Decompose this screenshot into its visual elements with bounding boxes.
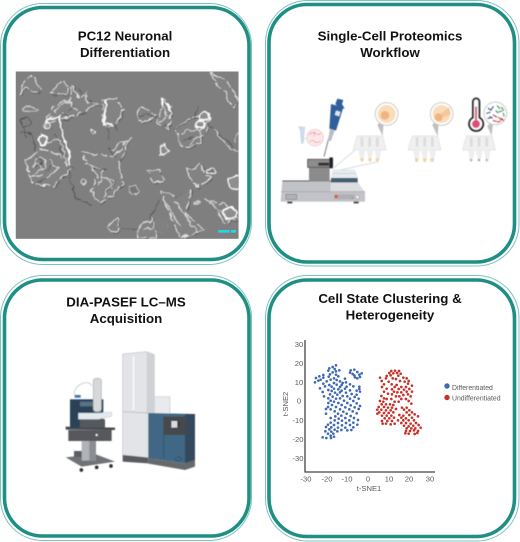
icon: mass spectrometer — [123, 352, 195, 470]
y axis tick labels: -20 — [293, 435, 303, 444]
icon: sample tube and cell — [299, 127, 323, 146]
x axis tick labels: 30 — [426, 474, 434, 484]
workflow illustration — [281, 98, 507, 203]
heading: Single-Cell Proteomics Workflow: Workflow — [360, 45, 420, 60]
y axis tick labels: 30 — [295, 340, 303, 349]
red points: undifferentiated — [377, 371, 421, 434]
icon: connector lines — [333, 149, 378, 171]
heading: Single-Cell Proteomics Workflow: Single-Cell Proteomics — [318, 28, 462, 44]
heading: Cell State Clustering & Heterogeneity: Cell State Clustering & — [318, 291, 462, 306]
axes — [305, 340, 435, 472]
heading: PC12 Neuronal Differentiation: PC12 Neuronal — [78, 28, 172, 44]
group: tube plate 3 with lysed-cell callout — [463, 102, 507, 162]
panel: single-cell proteomics workflow — [266, 0, 519, 266]
dark halos — [20, 75, 240, 240]
x axis tick labels: 0 — [366, 474, 370, 484]
legend: Differentiated — [452, 385, 493, 392]
round cells — [39, 135, 47, 145]
y axis tick labels: 0 — [297, 396, 301, 406]
x axis tick labels: 10 — [385, 474, 393, 484]
x axis tick labels: -20 — [322, 474, 332, 484]
axis label: t-SNE2: t-SNE2 — [281, 392, 290, 416]
axis label: t-SNE1: t-SNE1 — [357, 484, 381, 493]
panel: cell state clustering and heterogeneity — [266, 276, 519, 541]
instrument illustration — [66, 352, 195, 472]
legend — [444, 383, 501, 402]
y axis tick labels: 10 — [295, 378, 303, 387]
x axis tick labels: -30 — [301, 474, 311, 484]
t-SNE scatter plot — [281, 340, 501, 493]
cell bodies — [19, 75, 42, 94]
heading: PC12 Neuronal Differentiation: Differentiation — [80, 45, 170, 60]
micrograph: PC12 cells — [16, 71, 243, 240]
scale bar — [218, 230, 236, 233]
group: tube plate 1 with cell callout — [353, 103, 398, 161]
y axis tick labels: -30 — [293, 454, 303, 463]
x axis tick labels: -10 — [342, 474, 352, 484]
x axis tick labels: 20 — [405, 474, 413, 484]
icon: thermometer — [469, 98, 483, 131]
interior texture — [30, 102, 230, 233]
panel: PC12 neuronal differentiation — [0, 4, 252, 264]
heading: Cell State Clustering & Heterogeneity: Heterogeneity — [346, 308, 435, 322]
icon: dispensing instrument — [281, 157, 365, 203]
panel: DIA-PASEF LC-MS acquisition — [0, 276, 252, 540]
icon: LC system on cart — [66, 378, 115, 472]
heading: DIA-PASEF LC–MS Acquisition: Acquisition — [90, 311, 162, 326]
blue points: differentiated — [315, 365, 362, 438]
y axis tick labels: 20 — [295, 359, 303, 368]
icon: pipette — [324, 99, 345, 157]
heading: DIA-PASEF LC–MS Acquisition: DIA-PASEF LC–MS — [66, 294, 186, 310]
y axis tick labels: -10 — [293, 416, 303, 425]
group: tube plate 2 with cell callout — [408, 103, 453, 162]
legend: Undifferentiated — [452, 396, 501, 402]
y axis tick labels — [293, 340, 303, 463]
x axis tick labels — [301, 474, 434, 484]
